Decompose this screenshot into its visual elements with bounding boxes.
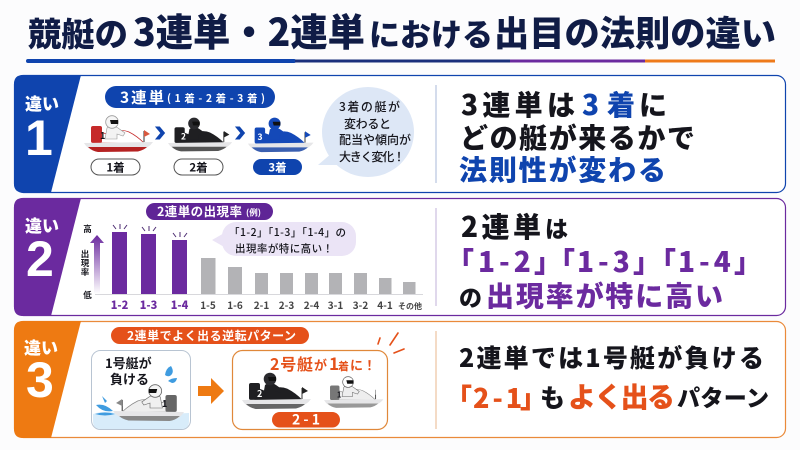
takeaway 2: 出現率が特に高い: [486, 275, 723, 315]
box: 2号艇が1着に: 1: [329, 350, 339, 375]
takeaway 2: 「: [547, 241, 575, 281]
takeaway 3: よく出る: [568, 376, 675, 416]
title: 競艇の: [28, 8, 128, 56]
takeaway 3: 2連単では1号艇が負ける: [459, 339, 764, 375]
result pill: 2-1: 2 - 1: [292, 410, 320, 430]
tab: 違い 1: [14, 75, 81, 192]
takeaway 1: [459, 84, 695, 189]
bar chart: 1-5: [200, 297, 216, 312]
tab: 違い 2: 2: [26, 231, 54, 287]
label: 3着: [253, 159, 302, 176]
label: 2着: 2着: [189, 160, 208, 176]
callout: 配当や傾向が: [339, 131, 411, 148]
takeaway 3: 「: [445, 377, 472, 416]
y axis: 低: [83, 289, 92, 301]
callout: 大きく変化！: [339, 148, 405, 165]
bar chart: 4-1: [377, 297, 393, 312]
takeaway 2: の: [459, 279, 482, 313]
bar chart: [95, 224, 423, 313]
callout: 「1-2」「1-3」「1-4」の: [229, 225, 346, 240]
bar chart: 1-6: [227, 297, 243, 312]
bar chart: 3-1: [328, 297, 343, 312]
title: 出目の法則の違い: [494, 6, 776, 57]
arrow: [236, 127, 244, 139]
boat 1: [84, 116, 153, 152]
box: 2号艇が1着に: 1: [337, 389, 342, 400]
label: 1着: 1着: [106, 160, 125, 176]
takeaway 2: [446, 206, 762, 315]
title: [28, 2, 776, 57]
tab: 違い 3: [14, 321, 81, 438]
box: 1号艇が負ける: [92, 350, 190, 430]
takeaway 2: 」: [534, 241, 562, 281]
takeaway 2: 1-3: [577, 241, 634, 281]
takeaway 1: に: [639, 84, 667, 124]
arrow: [198, 378, 224, 404]
takeaway 1: 3着: [582, 84, 635, 124]
takeaway 2: 「: [446, 241, 474, 281]
arrow: [156, 127, 164, 139]
tab: 違い 1: 1: [25, 110, 53, 166]
heading pill: 2連単の出現率: (例): [246, 206, 261, 218]
panel: difference 2: [14, 198, 786, 316]
takeaway 2: 1-2: [478, 241, 535, 281]
box: 1号艇が負ける: 負ける: [110, 369, 149, 388]
tab: 違い 3: 違い: [24, 334, 58, 359]
box: 2号艇が1着に: に！: [350, 355, 376, 374]
box: 2号艇が1着に: 2: [257, 387, 262, 400]
boat 1: 1: [100, 129, 105, 142]
y axis: 現: [81, 257, 90, 269]
box: 2号艇が1着に: 2号艇: [270, 351, 313, 375]
bar chart: 2-3: [279, 297, 294, 312]
takeaway 3: [445, 339, 769, 416]
panel: difference 3: [14, 321, 786, 438]
y axis: 出: [81, 248, 89, 260]
box: 2号艇が1着に: 着: [338, 358, 349, 374]
box: 1号艇が負ける: 1号艇が: [105, 353, 152, 372]
takeaway 3: パターン: [677, 379, 769, 413]
box: 1号艇が負ける: 1: [162, 397, 167, 410]
boat 2: [168, 118, 232, 151]
bar chart: 2-4: [304, 297, 319, 312]
title: 3連単・2連単: [133, 2, 365, 57]
bar chart: 1-3: [140, 297, 158, 313]
bar chart: 1-4: [171, 297, 189, 313]
label: 2着: [174, 159, 223, 176]
boat 3: 3: [257, 131, 263, 143]
takeaway 3: も: [540, 379, 565, 415]
takeaway 2: 」: [633, 241, 661, 281]
takeaway 2: 「: [648, 241, 676, 281]
takeaway 1: 3連単は: [461, 84, 575, 124]
title: における: [369, 10, 493, 55]
bar chart: 1-2: [111, 297, 129, 313]
takeaway 2: 」: [734, 241, 762, 281]
label: 1着: [91, 159, 140, 176]
callout: [212, 222, 356, 256]
heading pill: 2連単の出現率: 2連単の出現率: [157, 201, 242, 220]
takeaway 3: 」: [520, 377, 547, 416]
takeaway 2: 1-4: [678, 241, 735, 281]
tab: 違い 3: 3: [26, 352, 54, 408]
callout: 3着の艇が: [339, 98, 400, 115]
callout: 変わると: [344, 115, 391, 132]
box: 2号艇が1着に: が: [314, 355, 327, 374]
result pill: 2-1: [272, 410, 340, 430]
takeaway 1: 法則性が変わる: [459, 149, 666, 189]
y axis: [81, 223, 104, 301]
bar chart: その他: [398, 301, 422, 312]
label: 3着: 3着: [268, 160, 287, 176]
tab: 違い 2: [14, 198, 81, 316]
heading pill: 3連単: (1着-2着-3着): [167, 91, 265, 106]
takeaway 2: は: [545, 210, 568, 244]
callout: 出現率が特に高い！: [235, 241, 333, 256]
tab: 違い 2: 違い: [25, 212, 59, 237]
panel: difference 1: [14, 75, 786, 192]
heading pill: 3連単: 3連単: [120, 86, 164, 108]
heading pill: 2連単でよく出る逆転パターン: [127, 327, 296, 344]
boat 3: [248, 118, 314, 152]
y axis: 率: [81, 266, 90, 278]
bar chart: 2-1: [254, 297, 269, 312]
callout: [318, 87, 414, 177]
takeaway 1: どの艇が来るかで: [460, 117, 695, 157]
takeaway 3: 2-1: [473, 377, 525, 416]
tab: 違い 1: 違い: [25, 90, 59, 115]
box: 2号艇が1着に: [232, 350, 388, 430]
bar chart: 3-2: [353, 297, 368, 312]
takeaway 2: 2連単: [461, 206, 541, 246]
boat 2: 2: [181, 130, 186, 142]
heading pill: 2連単の出現率: [146, 201, 273, 220]
y axis: 高: [83, 223, 92, 235]
heading pill: 3連単: [105, 86, 275, 108]
